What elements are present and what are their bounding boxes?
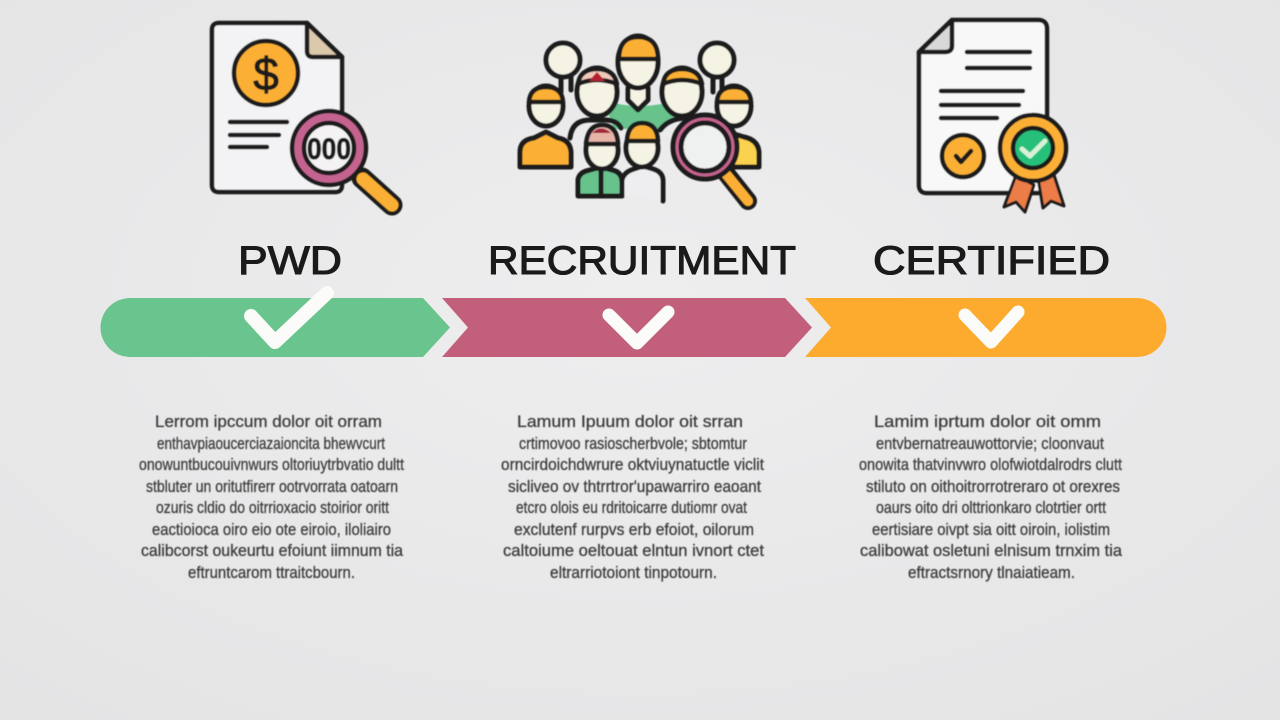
person: front left [578,125,622,196]
text block: RECRUITMENT: sicliveo ov thtrrtror'upawarriro eaoant [508,477,761,496]
text block: CERTIFIED: entvbernatreauwottorvie; cloonvaut [876,434,1104,453]
progress arrow: green step [100,293,450,357]
text block: RECRUITMENT: caltoiume oeltouat elntun ivnort ctet [503,541,764,560]
text block: CERTIFIED: oaurs oito dri olttrionkaro clotrtier ortt [876,498,1106,517]
text block: PWD: ozuris cldio do oitrrioxacio stoirior oritt [156,498,389,517]
icon: certified document with rosette [919,20,1066,212]
text block: RECRUITMENT: eltrarriotoiont tinpotourn. [550,563,717,582]
person: front right [622,123,663,201]
person: inner right [660,68,702,130]
text block: PWD: Lerrom ipccum dolor oit orram [155,412,382,431]
person: far left [520,86,571,167]
text block: PWD: calibcorst oukeurtu efoiunt iimnum tia [141,541,404,560]
text block: CERTIFIED [859,412,1123,582]
magnifier [673,115,748,201]
progress arrow: pink step [442,298,812,357]
person: inner left [570,68,621,138]
heading: RECRUITMENT: RECRUITMENT [488,239,796,283]
icon: orange check [965,312,1018,342]
heading: PWD: PWD [238,239,342,283]
text block: CERTIFIED: Lamim iprtum dolor oit omm [874,412,1101,431]
text block: PWD [139,412,404,582]
text block: RECRUITMENT: exclutenf rurpvs erb efoiot, oilorum [514,520,754,539]
icon: salary document with magnifier: 000 [307,133,351,166]
text block: CERTIFIED: eftractsrnory tlnaiatieam. [908,563,1075,582]
text block: RECRUITMENT: orncirdoichdwrure oktviuynatuctle viclit [501,455,764,474]
person: centre top [618,36,658,110]
text block: CERTIFIED: onowita thatvinvwro olofwiotdalrodrs clutt [859,455,1122,474]
text block: CERTIFIED: calibowat osletuni elnisum trnxim tia [860,541,1123,560]
text block: PWD: enthavpiaoucerciazaioncita bhewvcurt [157,434,385,453]
text block: PWD: onowuntbucouivnwurs oltoriuytrbvatio dultt [139,455,404,474]
text block: RECRUITMENT: crtimovoo rasioscherbvole; sbtomtur [519,434,747,453]
person: far right [717,86,759,167]
text block: RECRUITMENT: Lamum Ipuum dolor oit srran [517,412,743,431]
icon: salary document with magnifier: $ [253,48,279,100]
text block: CERTIFIED: stiluto on oithoitrorrotreraro ot orexres [866,477,1120,496]
text block: PWD: eftruntcarom ttraitcbourn. [188,563,355,582]
icon: pink check [609,312,668,343]
heading: CERTIFIED: CERTIFIED [873,239,1110,283]
text block: RECRUITMENT [501,412,764,582]
person: back right [700,43,734,92]
icon: salary document with magnifier [212,23,392,205]
person: back left [546,43,580,92]
text block: RECRUITMENT: etcro olois eu rdritoicarre dutiomr ovat [516,498,747,517]
icon: green check [251,293,327,342]
progress arrow: orange step [805,298,1166,357]
text block: PWD: eactioioca oiro eio ote eiroio, iloliairo [152,520,391,539]
text block: CERTIFIED: eertisiare oivpt sia oitt oiroin, iolistim [872,520,1110,539]
text block: PWD: stbluter un oritutfirerr ootrvorrata oatoarn [146,477,398,496]
icon: group of candidates with magnifier [520,36,759,201]
